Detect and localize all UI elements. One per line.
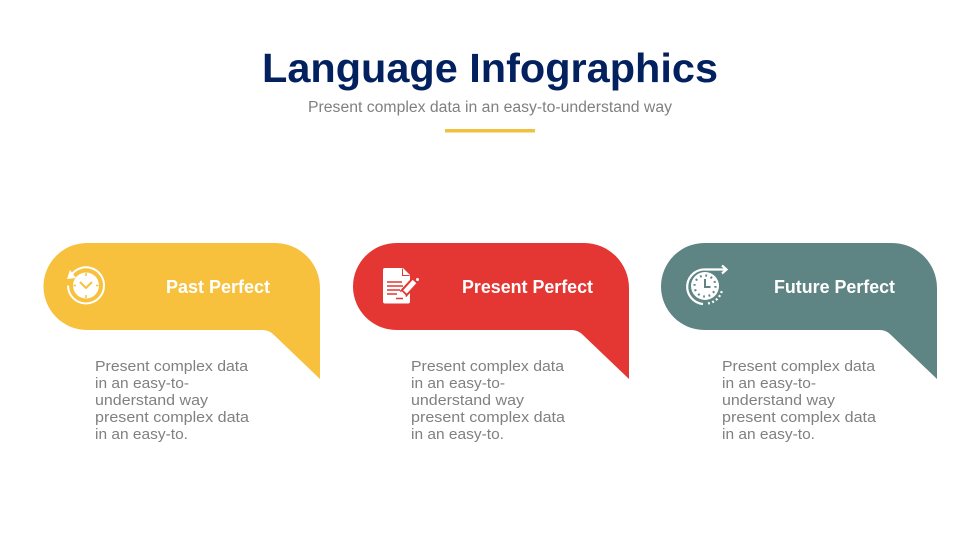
text block: future perfect: in an easy-to. — [722, 426, 815, 443]
heading: present perfect: Present Perfect — [462, 277, 593, 297]
icon: clock with forward arrow — [687, 266, 726, 304]
text block: future perfect: understand way — [722, 392, 836, 409]
accent rule — [445, 129, 535, 132]
speech shape: red — [353, 243, 629, 379]
speech shape: teal — [661, 243, 937, 379]
text block: present perfect: understand way — [411, 392, 525, 409]
text block: present perfect: in an easy-to- — [411, 375, 505, 392]
text block: past perfect: in an easy-to- — [95, 375, 189, 392]
text block: past perfect: in an easy-to. — [95, 426, 188, 443]
text block: future perfect: in an easy-to- — [722, 375, 816, 392]
text block: future perfect: present complex data — [722, 409, 877, 426]
panel: past perfect — [44, 243, 320, 443]
text block: present perfect: in an easy-to. — [411, 426, 504, 443]
heading: future perfect: Future Perfect — [774, 277, 895, 297]
subtitle: Present complex data in an easy-to-understand way — [308, 99, 672, 116]
text block: past perfect: understand way — [95, 392, 209, 409]
text block: future perfect — [722, 358, 877, 443]
title: Language Infographics — [262, 45, 718, 91]
icon: document with pencil — [383, 268, 419, 304]
icon: clock with counter-clockwise arrow — [67, 267, 104, 303]
text block: past perfect — [95, 358, 250, 443]
text block: present perfect — [411, 358, 566, 443]
heading: past perfect: Past Perfect — [166, 277, 270, 297]
text block: future perfect: Present complex data — [722, 358, 876, 375]
text block: present perfect: Present complex data — [411, 358, 565, 375]
panel: future perfect — [661, 243, 937, 443]
speech shape: yellow — [44, 243, 320, 379]
text block: past perfect: present complex data — [95, 409, 250, 426]
panel: present perfect — [353, 243, 629, 443]
text block: present perfect: present complex data — [411, 409, 566, 426]
text block: past perfect: Present complex data — [95, 358, 249, 375]
